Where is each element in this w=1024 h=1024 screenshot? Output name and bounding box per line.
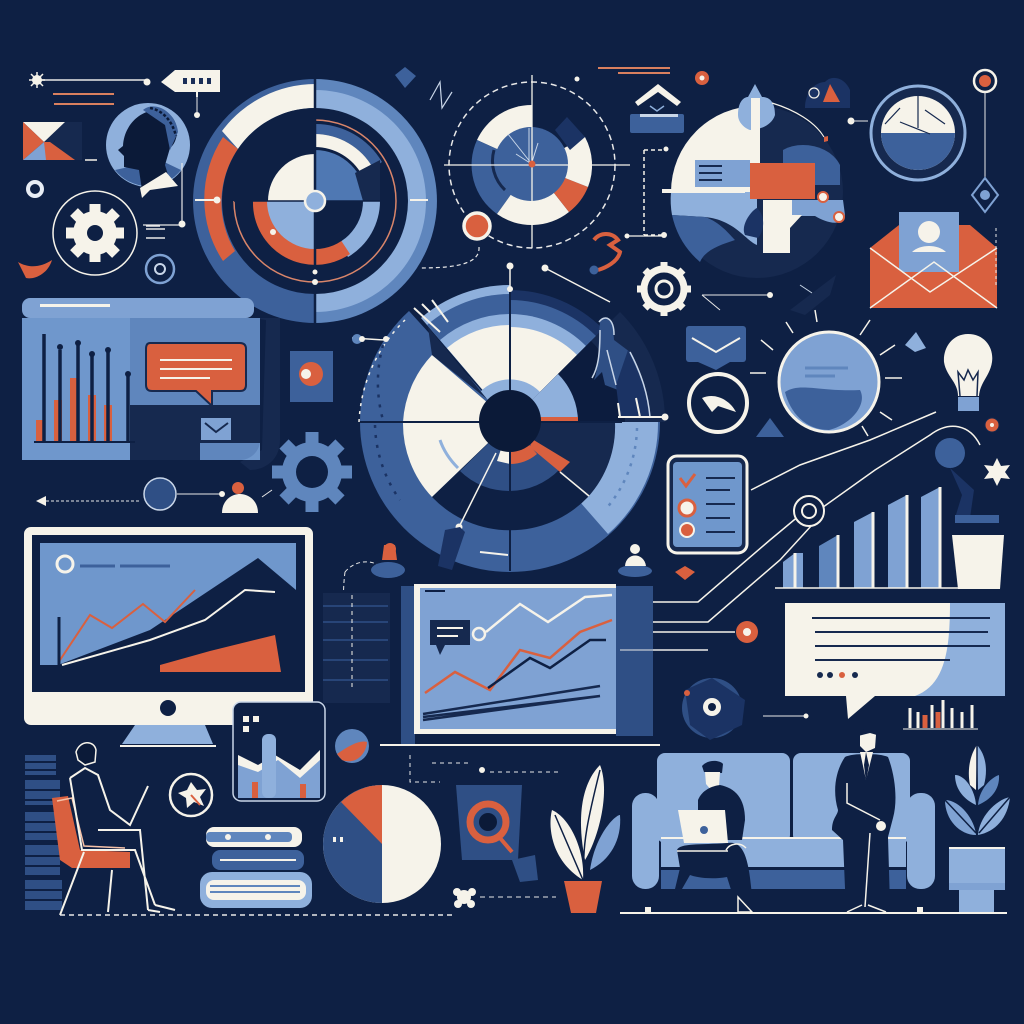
chart: pie (323, 785, 441, 903)
icon: top right pin (972, 70, 998, 212)
icon: small globe (335, 729, 369, 763)
chart: small bars (903, 700, 978, 729)
icon: light bulb (944, 334, 1010, 486)
icon: clover badge (170, 774, 212, 816)
illustration: stack of books (200, 827, 312, 908)
icon: cloud with orange figure (805, 78, 868, 124)
illustration: potted plant right (945, 745, 1010, 912)
icons: mail and badge (686, 326, 747, 432)
illustration: globe with sun rays (750, 310, 926, 437)
icon: open envelope (870, 212, 997, 308)
panel: monitor left (24, 527, 378, 746)
small dark gear orb (620, 650, 808, 740)
icon: desk lamp and cup (935, 438, 1004, 589)
icon: envelope square (23, 122, 97, 160)
panel: dark tablet with chart (233, 702, 325, 801)
chart: crosshair donut (420, 75, 630, 268)
icon: orange fish tile (290, 351, 333, 402)
illustration: person in chair (22, 743, 175, 915)
small left icons (18, 182, 174, 283)
chart: large radial donut (193, 78, 437, 324)
top center small icons (395, 67, 709, 133)
chart: large central wheel (352, 262, 668, 572)
icon: orange magnifier tile (456, 785, 538, 882)
illustration: globe with document (624, 84, 845, 278)
top-left connector with speech tag (29, 70, 220, 118)
panel: phone checklist (668, 456, 747, 553)
icon: puzzle flower (453, 888, 476, 908)
connector dashed (60, 755, 560, 915)
chart: line connectors to trend (618, 412, 980, 650)
illustration: potted plant centre (550, 765, 620, 913)
panel: dashboard card with bars (22, 298, 280, 470)
icon: gauge circle (871, 86, 965, 180)
icon: large gear (53, 191, 137, 275)
chart: right bars (775, 487, 985, 588)
icon: small centre gear with connectors (542, 234, 836, 316)
connector row with arrow and bell (36, 478, 272, 513)
panel: centre monitor with line chart (323, 584, 660, 745)
panel: speech bubble right (785, 603, 1005, 719)
icon: head profile (106, 103, 190, 228)
icon: orange ring connector (736, 621, 758, 643)
illustration: sofa with two people (620, 728, 1007, 913)
icon: gear medium (272, 432, 352, 512)
icon: person pin centre (371, 543, 695, 580)
